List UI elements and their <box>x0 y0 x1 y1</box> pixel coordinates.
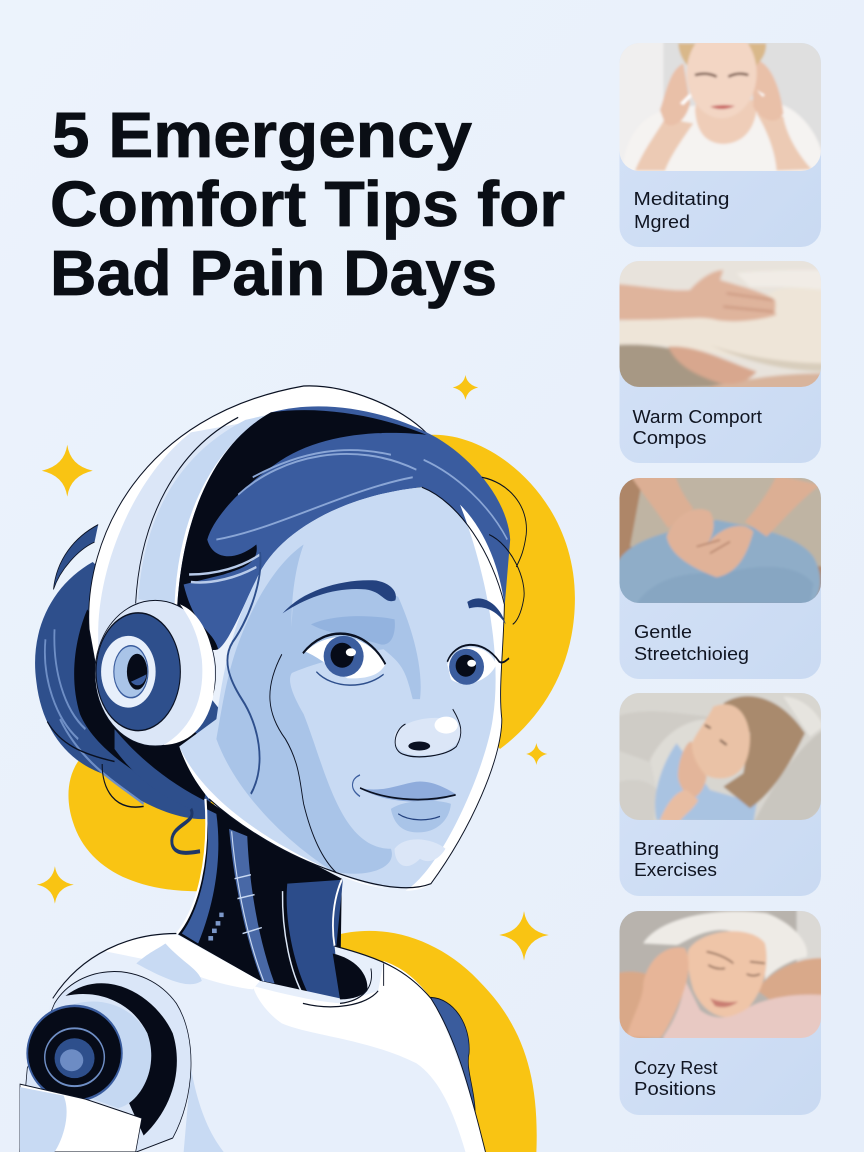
mouth <box>352 775 456 832</box>
nose <box>394 709 462 757</box>
shoulder joint <box>20 972 191 1152</box>
label: Compos <box>632 428 706 448</box>
face <box>179 487 504 891</box>
photo: woman with towel wrap and pink robe <box>617 908 823 1042</box>
robot neck <box>176 799 343 1001</box>
illustration: robot woman with yellow shapes <box>20 375 575 1152</box>
ear cup <box>95 600 216 746</box>
card 5: cozy rest positions <box>617 908 823 1115</box>
photo: hands on soft blanket <box>617 258 823 390</box>
label: Streetchioieg <box>634 644 749 664</box>
top hair <box>177 406 526 650</box>
card 3: gentle stretching <box>617 475 823 679</box>
label: Breathing <box>634 839 719 859</box>
label: Positions <box>634 1079 716 1099</box>
photo: woman touching temples <box>620 43 821 171</box>
label: Meditating <box>634 189 730 209</box>
card 4: breathing exercises <box>617 690 823 896</box>
sparkle stars <box>37 375 549 960</box>
label: Gentle <box>634 622 692 642</box>
photo: woman resting on cushions <box>617 690 823 823</box>
back hair bun <box>35 525 227 853</box>
eyebrows <box>283 580 506 624</box>
label: Cozy Rest <box>634 1058 718 1078</box>
title: Bad Pain Days <box>50 237 497 309</box>
card 1: meditating <box>617 28 823 247</box>
label <box>632 407 762 448</box>
label <box>634 1058 718 1099</box>
title: 5 Emergency <box>52 99 472 171</box>
label: Warm Comport <box>632 407 762 427</box>
label <box>634 839 719 880</box>
label <box>634 189 730 232</box>
card 2: warm compress <box>617 258 823 463</box>
robot torso <box>20 934 485 1152</box>
helmet shell <box>89 386 427 669</box>
left eye <box>303 634 385 685</box>
title <box>50 99 565 309</box>
photo: clasped hands on jeans <box>617 475 823 607</box>
yellow background blobs <box>68 435 575 1152</box>
robot back arm <box>431 997 475 1118</box>
label <box>634 622 749 664</box>
right eye <box>447 645 509 685</box>
label: Exercises <box>634 860 717 880</box>
robot hand block <box>20 1084 142 1152</box>
label: Mgred <box>634 212 690 232</box>
title: Comfort Tips for <box>50 168 565 240</box>
